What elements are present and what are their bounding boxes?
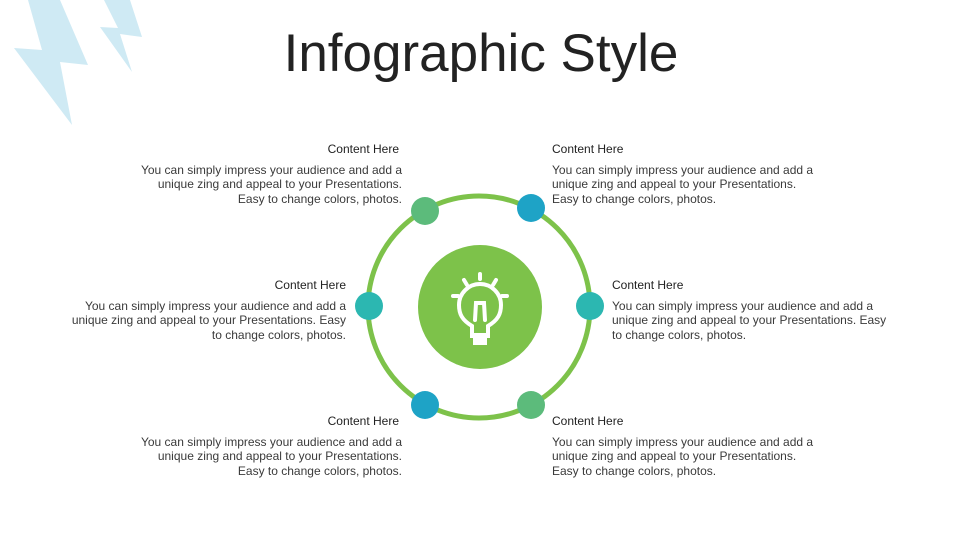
text: top left: unique zing and appeal to your Presentations.	[158, 177, 402, 191]
text: bottom right	[552, 414, 814, 478]
text: top right	[552, 142, 814, 206]
text: bottom left	[141, 414, 402, 478]
text: top right: Content Here	[552, 142, 623, 156]
text: bottom right: Content Here	[552, 414, 623, 428]
text: bottom left: Easy to change colors, photos.	[238, 464, 402, 478]
text: bottom left: unique zing and appeal to your Presentations.	[158, 449, 402, 463]
text: middle left: unique zing and appeal to your Presentations. Easy	[72, 313, 346, 327]
text: bottom right: You can simply impress your audience and add a	[552, 434, 813, 448]
text: top right: You can simply impress your audience and add a	[552, 162, 813, 176]
text: top right: Easy to change colors, photos.	[552, 192, 716, 206]
text: middle right: unique zing and appeal to your Presentations. Easy	[612, 313, 886, 327]
text: top right: unique zing and appeal to your Presentations.	[552, 177, 796, 191]
dots	[411, 197, 439, 225]
text: bottom right: Easy to change colors, photos.	[552, 464, 716, 478]
title: Infographic Style	[284, 24, 678, 83]
text: middle left: You can simply impress your audience and add a	[85, 298, 346, 312]
text: middle right: to change colors, photos.	[612, 328, 746, 342]
text: middle left	[72, 278, 346, 342]
text: middle right: Content Here	[612, 278, 683, 292]
text: bottom left: Content Here	[328, 414, 399, 428]
text: top left	[141, 142, 402, 206]
text: bottom left: You can simply impress your audience and add a	[141, 434, 402, 448]
text: middle right: You can simply impress your audience and add a	[612, 298, 873, 312]
center circle with bulb icon	[418, 245, 542, 369]
text: middle left: Content Here	[275, 278, 346, 292]
text: bottom right: unique zing and appeal to your Presentations.	[552, 449, 796, 463]
text: top left: Content Here	[328, 142, 399, 156]
text: middle left: to change colors, photos.	[212, 328, 346, 342]
text: top left: You can simply impress your audience and add a	[141, 162, 402, 176]
text: top left: Easy to change colors, photos.	[238, 192, 402, 206]
decoration: lightning bolts	[14, 0, 142, 125]
text: middle right	[612, 278, 886, 342]
